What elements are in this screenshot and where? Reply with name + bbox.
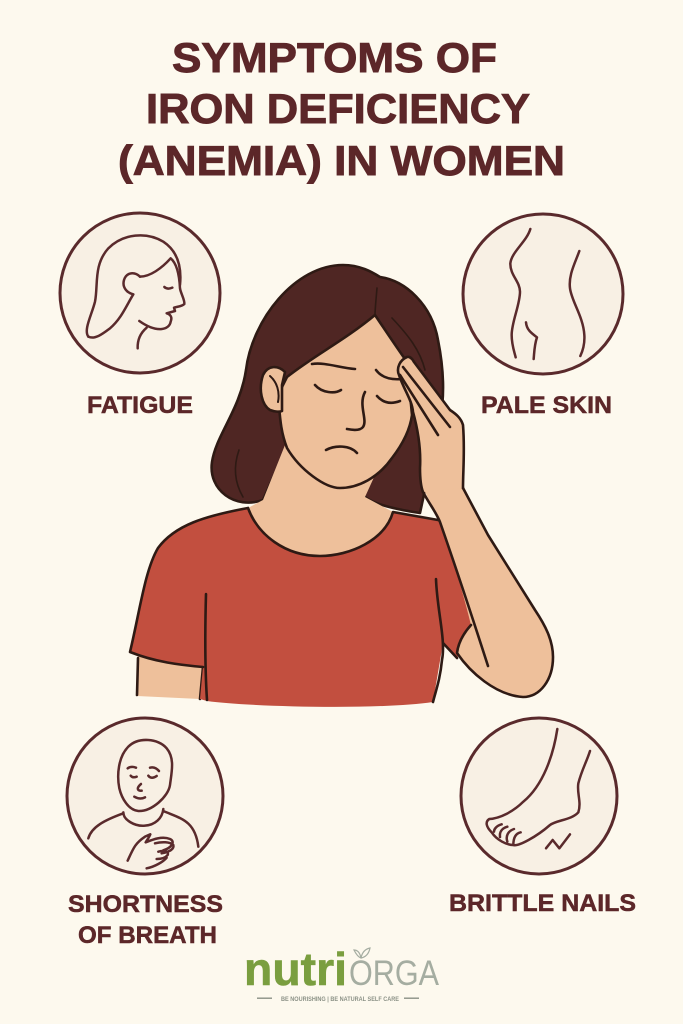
neck and chest skin [248,445,393,556]
icon: pale skin [463,214,623,374]
title [118,34,565,184]
label: brittle nails: BRITTLE NAILS [449,890,636,917]
left arm skin [137,655,204,699]
arm [423,485,553,697]
logo: nutriORGA: ORGA [349,954,440,993]
hair [212,265,443,513]
icon: leaf sprout [354,948,370,958]
title: IRON DEFICIENCY [146,85,530,132]
hand on temple [398,357,464,492]
shirt outline [130,508,457,702]
title: SYMPTOMS OF [172,34,497,81]
icon: brittle nails [461,718,617,874]
title: (ANEMIA) IN WOMEN [118,137,565,184]
hair strands [235,288,425,497]
label: shortness of breath [68,891,223,949]
label: shortness of breath: OF BREATH [78,922,217,949]
face [278,315,412,488]
label: shortness of breath: SHORTNESS [68,891,223,918]
logo: nutriORGA [244,943,440,1003]
label: fatigue: FATIGUE [87,392,193,419]
logo: nutriORGA: nutri [244,943,347,995]
central illustration: woman with headache [130,265,553,707]
label: pale skin: PALE SKIN [481,392,612,419]
shirt [130,508,478,707]
icon: fatigue [60,213,220,373]
ear [261,367,285,412]
icon: shortness of breath [67,718,223,874]
facial features [312,364,402,453]
tagline: BE NOURISHING | BE NATURAL SELF CARE [281,996,400,1003]
